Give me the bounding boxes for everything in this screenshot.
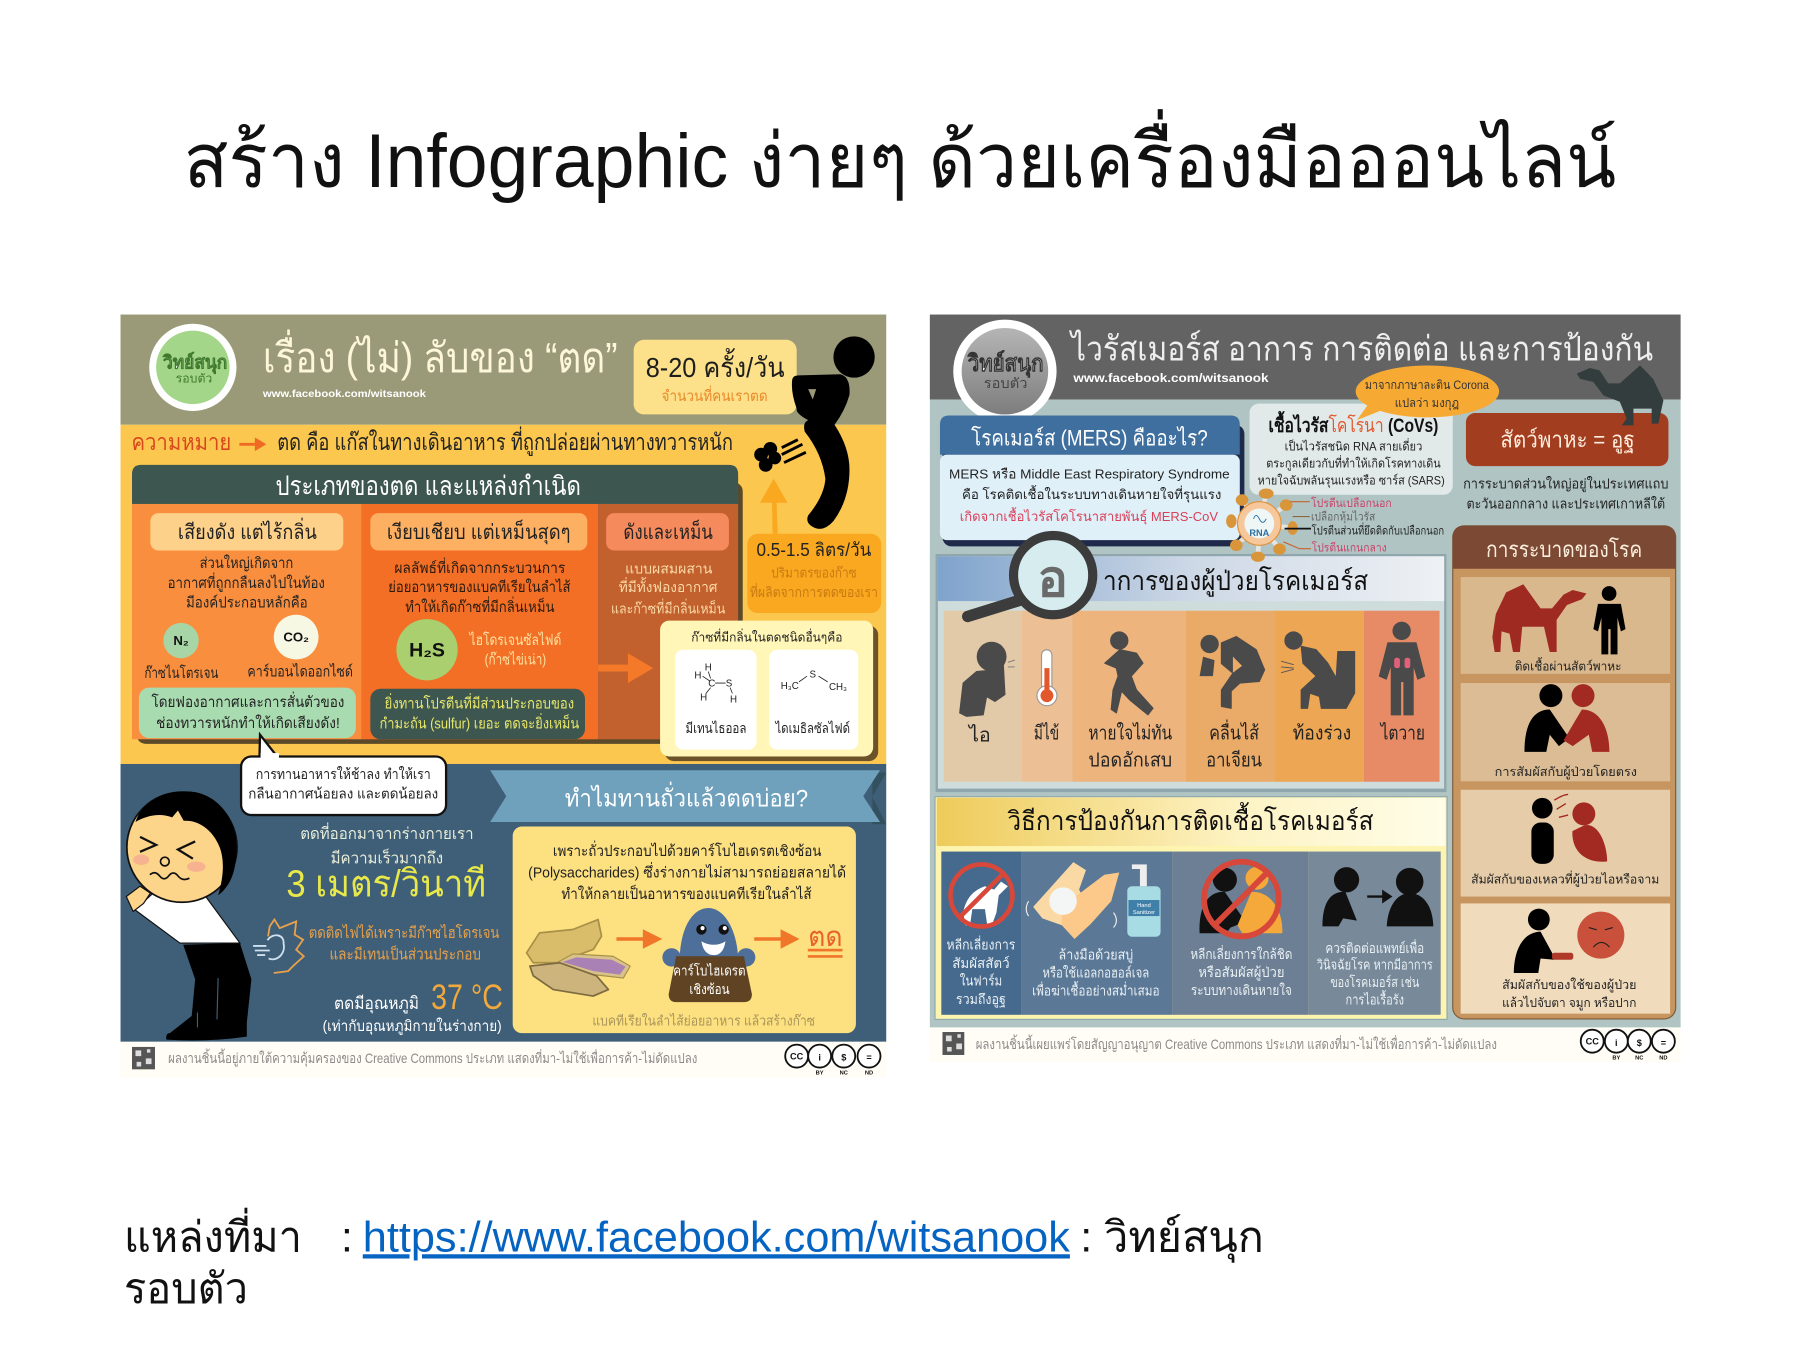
panel: beans explanation: เพราะถั่วประกอบไปด้วยคาร์โบไฮเดรตเชิงซ้อน: [553, 840, 821, 860]
panel: beans explanation: ทำให้กลายเป็นอาหารของแบคทีเรียในลำไส้: [561, 884, 812, 903]
icon: no contact: [1200, 862, 1282, 936]
panel: what is MERS: เกิดจากเชื้อไวรัสโคโรนาสายพันธุ์ MERS-CoV: [960, 507, 1218, 525]
virus labels: โปรตีนแกนกลาง: [1312, 540, 1387, 554]
text: outbreak regions: [1463, 476, 1669, 512]
icon: touching items: [1514, 909, 1624, 973]
icon: diarrhoea: [1281, 631, 1355, 708]
column: silent smelly: [370, 513, 587, 739]
heading: เรื่อง (ไม่) ลับของ “ตด”: [263, 329, 618, 381]
panel: disease transmission: สัมผัสกับของเหลวที่ผู้ป่วยไอหรือจาม: [1471, 870, 1659, 887]
footer: licence: CC: [1586, 1037, 1599, 1047]
prevention labels: หลีกเลี่ยงการ: [946, 936, 1015, 953]
panel: disease transmission: ติดเชื้อผ่านสัตว์พาหะ: [1515, 656, 1621, 673]
icon: flame burst: [253, 920, 304, 973]
temperature text: (เท่ากับอุณหภูมิกายในร่างกาย): [323, 1017, 502, 1035]
footer: licence: BY: [1612, 1056, 1620, 1062]
title: สร้าง Infographic ง่ายๆ ด้วยเครื่องมือออนไลน์: [184, 109, 1616, 204]
panel: left infographic about farts: [121, 315, 886, 1077]
callout: corona meaning: มาจากภาษาละติน Corona: [1365, 378, 1489, 392]
column: loud and smelly: และก๊าซที่มีกลิ่นเหม็น: [611, 599, 725, 618]
panel: symptoms: มีไข้: [1034, 722, 1059, 745]
molecule: methanethiol: [694, 662, 737, 706]
panel: what is MERS: โรคเมอร์ส (MERS) คืออะไร?: [971, 425, 1208, 450]
icon: washing hands: [1026, 862, 1161, 939]
result: fart: ตด: [808, 921, 843, 952]
footer: licence: CC: [790, 1052, 804, 1062]
flammable text: และมีเทนเป็นส่วนประกอบ: [329, 945, 481, 964]
footer: licence: i: [1615, 1038, 1618, 1048]
icon: camel and person: [1492, 584, 1626, 654]
speed text: 3 เมตร/วินาที: [286, 864, 486, 906]
icon: magnifying glass: อ: [1038, 550, 1068, 607]
panel: disease transmission: สัมผัสกับของใช้ของผู้ป่วย: [1502, 978, 1636, 993]
panel: other smelly gases: ไดเมธิลซัลไฟด์: [775, 720, 850, 736]
url: www.facebook.com/witsanook: [1072, 371, 1269, 385]
source line: รอบตัว: [124, 1265, 248, 1312]
virus labels: [1283, 496, 1444, 554]
stat: times per day: [634, 340, 797, 414]
footer: licence: BY: [816, 1070, 824, 1076]
icon: cough: [960, 642, 1015, 716]
stat: litres per day: ที่ผลิตจากการตดของเรา: [750, 583, 878, 600]
prevention labels: ของโรคเมอร์ส เช่น: [1330, 974, 1420, 990]
virus labels: โปรตีนเปลือกนอก: [1311, 496, 1392, 510]
icon: shortness of breath: [1105, 631, 1153, 715]
footer: licence: [132, 1045, 880, 1076]
icon: bacteria with carbohydrate box: [662, 908, 755, 1002]
callout: corona meaning: แปลว่า มงกุฎ: [1395, 396, 1459, 411]
text: outbreak regions: การระบาดส่วนใหญ่อยู่ในประเทศแถบ: [1463, 476, 1669, 493]
panel: prevention: วิธีการป้องกันการติดเชื้อโรคเมอร์ส: [1007, 802, 1374, 836]
panel: symptoms: ปอดอักเสบ: [1088, 749, 1172, 771]
column: silent smelly: กำมะถัน (sulfur) เยอะ ตดจะยิ่งเหม็น: [380, 712, 579, 732]
column: silent smelly: H₂S: [409, 640, 445, 662]
prevention labels: รวมถึงอูฐ: [956, 992, 1006, 1008]
stat: litres per day: [747, 534, 881, 613]
text: outbreak regions: ตะวันออกกลาง และประเทศเกาหลีใต้: [1467, 496, 1665, 512]
temperature text: [323, 977, 503, 1035]
logo: วิทย์สนุก: [162, 351, 227, 374]
panel: other smelly gases: [660, 621, 878, 761]
footer: licence: [942, 1030, 1675, 1062]
panel: symptoms: ไตวาย: [1379, 722, 1425, 745]
panel: disease transmission: การระบาดของโรค: [1486, 537, 1642, 562]
footer: licence: =: [866, 1053, 872, 1063]
speed text: มีความเร็วมากถึง: [331, 847, 443, 867]
panel: coronavirus: เชื้อไวรัสโคโรนา (CoVs): [1268, 410, 1438, 437]
panel: symptoms: ไอ: [967, 724, 991, 747]
icon: washing hands: Sanitizer: [1133, 910, 1155, 916]
panel: coronavirus: หายใจฉับพลันรุนแรงหรือ ซาร์ส (SARS): [1258, 473, 1445, 488]
molecule: methanethiol: S: [726, 678, 733, 689]
icon: droplets: [1531, 794, 1607, 864]
molecule: dimethyl sulfide: S: [809, 669, 816, 680]
prevention labels: ควรติดต่อแพทย์เพื่อ: [1325, 939, 1424, 956]
stat: litres per day: 0.5-1.5 ลิตร/วัน: [757, 539, 872, 560]
source line: :: [341, 1213, 353, 1260]
panel: coronavirus: เป็นไวรัสชนิด RNA สายเดี่ยว: [1285, 437, 1422, 453]
ribbon heading: why beans: [490, 770, 886, 824]
prevention labels: ในฟาร์ม: [960, 973, 1002, 989]
panel: carrier is camel: สัตว์พาหะ = อูฐ: [1500, 427, 1635, 454]
column: loud and smelly: แบบผสมผสาน: [625, 562, 713, 578]
logo: [953, 320, 1057, 423]
footer: licence: NC: [840, 1070, 848, 1076]
panel: symptoms: าการของผู้ป่วยโรคเมอร์ส: [1103, 566, 1368, 597]
panel: prevention: [935, 797, 1447, 1019]
prevention labels: หรือสัมผัสผู้ป่วย: [1198, 965, 1284, 981]
source line: แหล่งที่มา: [124, 1207, 302, 1260]
column: loud odourless: อากาศที่ถูกกลืนลงไปในท้อง: [168, 572, 325, 592]
panel: symptoms: [936, 554, 1446, 792]
column: silent smelly: ทำให้เกิดก๊าซที่มีกลิ่นเหม็น: [405, 596, 554, 616]
panel: disease transmission: [1453, 526, 1676, 1019]
temperature text: 37 °C: [431, 977, 503, 1017]
arrow: [616, 929, 662, 949]
arrow: [598, 653, 653, 683]
panel: other smelly gases: ก๊าซที่มีกลิ่นในตดชนิดอื่นๆคือ: [691, 629, 842, 645]
callout: corona meaning: [1356, 366, 1499, 420]
stat: times per day: 8-20 ครั้ง/วัน: [646, 348, 785, 383]
icon: magnifying glass: [968, 536, 1093, 616]
stat: litres per day: ปริมาตรของก๊าซ: [771, 565, 857, 580]
logo: รอบตัว: [984, 376, 1027, 391]
icon: washing hands: Hand: [1137, 903, 1151, 909]
footer: licence: ND: [865, 1070, 873, 1076]
panel: coronavirus: [1250, 404, 1453, 495]
column: silent smelly: เงียบเชียบ แต่เหม็นสุดๆ: [387, 518, 571, 545]
footer: licence: $: [841, 1053, 846, 1063]
panel: right infographic about MERS: [930, 315, 1681, 1062]
icon: farting figure: [792, 336, 875, 529]
virus labels: เปลือกหุ้มไวรัส: [1311, 510, 1375, 523]
column: silent smelly: ยิ่งทานโปรตีนที่มีส่วนประกอบของ: [384, 692, 574, 712]
panel: other smelly gases: มีเทนไธออล: [686, 721, 746, 736]
icon: camel silhouette: [1577, 365, 1663, 425]
panel: beans explanation: [513, 827, 856, 1033]
column: loud odourless: CO₂: [283, 630, 309, 645]
panel: disease transmission: การสัมผัสกับผู้ป่วยโดยตรง: [1495, 764, 1637, 780]
panel: what is MERS: MERS หรือ Middle East Respiratory Syndrome: [949, 466, 1230, 481]
molecule: dimethyl sulfide: CH₃: [829, 682, 847, 693]
icon: gas puff: [754, 440, 806, 472]
prevention labels: หรือใช้แอลกอฮอล์เจล: [1042, 964, 1149, 980]
arrow: [754, 929, 800, 949]
callout: eat slowly: [241, 735, 446, 815]
column: loud and smelly: ที่มีทั้งฟองอากาศ: [619, 577, 717, 596]
prevention labels: เพื่อฆ่าเชื้ออย่างสม่ำเสมอ: [1032, 981, 1160, 999]
column: loud and smelly: [606, 513, 729, 618]
icon: man in discomfort: [126, 791, 251, 1040]
molecule: methanethiol: C: [708, 678, 715, 689]
up arrow: [760, 479, 788, 534]
column: loud and smelly: ดังและเหม็น: [623, 518, 713, 544]
heading: ไวรัสเมอร์ส อาการ การติดต่อ และการป้องกัน: [1068, 329, 1653, 368]
icon: peanut: [527, 920, 630, 996]
icon: virus diagram: [1226, 488, 1298, 562]
column: silent smelly: ผลลัพธ์ที่เกิดจากกระบวนการ: [394, 557, 565, 577]
definition: ตด คือ แก๊สในทางเดินอาหาร ที่ถูกปล่อยผ่านทางทวารหนัก: [277, 426, 733, 456]
logo: วิทย์สนุก: [967, 350, 1043, 378]
icon: bacteria with carbohydrate box: เชิงซ้อน: [689, 982, 730, 997]
panel: symptoms: อาเจียน: [1206, 749, 1262, 771]
prevention labels: วินิจฉัยโรค หากมีอาการ: [1317, 957, 1433, 973]
virus labels: โปรตีนส่วนที่ยึดติดกับเปลือกนอก: [1312, 522, 1444, 537]
callout: eat slowly: การทานอาหารให้ช้าลง ทำให้เรา: [256, 766, 431, 783]
footer: licence: i: [818, 1053, 821, 1063]
icon: vomiting: [1200, 635, 1265, 708]
footer: licence: ผลงานชิ้นนี้อยู่ภายใต้ความคุ้มครองของ Creative Commons ประเภท แสดงที่มา-ไม่ใช้เพื่อการค้า-ไม่ดัดแปลง: [168, 1048, 697, 1067]
panel: types of farts: ประเภทของตด และแหล่งกำเนิด: [276, 471, 581, 501]
prevention labels: ล้างมือด้วยสบู่: [1059, 948, 1133, 964]
molecule: dimethyl sulfide: [781, 669, 847, 693]
panel: types of farts: [132, 465, 743, 744]
panel: beans explanation: แบคทีเรียในลำไส้ย่อยอาหาร แล้วสร้างก๊าซ: [592, 1013, 815, 1029]
molecule: methanethiol: H: [700, 692, 707, 703]
stat: times per day: จำนวนที่คนเราตด: [662, 385, 768, 405]
panel: beans explanation: (Polysaccharides) ซึ่งร่างกายไม่สามารถย่อยสลายได้: [528, 862, 846, 882]
footer: licence: ผลงานชิ้นนี้เผยแพร่โดยสัญญาอนุญาต Creative Commons ประเภท แสดงที่มา-ไม่ใช้เพื่อการค้า-ไม่ดัดแปลง: [976, 1034, 1497, 1053]
prevention labels: การไอเรื้อรัง: [1346, 989, 1404, 1007]
column: loud odourless: คาร์บอนไดออกไซด์: [247, 663, 353, 681]
source line: : วิทย์สนุก: [1080, 1213, 1264, 1263]
prevention labels: [946, 936, 1433, 1008]
definition: ความหมาย: [131, 429, 231, 455]
ribbon heading: why beans: ทำไมทานถั่วแล้วตดบ่อย?: [565, 782, 808, 813]
footer: licence: $: [1637, 1038, 1642, 1048]
icon: see doctor: [1322, 867, 1433, 926]
panel: symptoms: หายใจไม่ทัน: [1088, 722, 1172, 745]
logo: รอบตัว: [176, 371, 212, 385]
panel: symptoms: ท้องร่วง: [1293, 723, 1351, 745]
icon: kidney failure: [1379, 622, 1425, 715]
icon: direct contact: [1524, 684, 1609, 752]
flammable text: ตดติดไฟได้เพราะมีก๊าซไฮโดรเจน: [309, 924, 500, 942]
column: loud odourless: ช่องทวารหนักทำให้เกิดเสียงดัง!: [156, 714, 340, 732]
definition: [131, 426, 733, 456]
url: www.facebook.com/witsanook: [262, 389, 426, 400]
callout: eat slowly: กลืนอากาศน้อยลง และตดน้อยลง: [248, 785, 438, 802]
panel: symptoms: คลื่นไส้: [1209, 720, 1259, 745]
molecule: methanethiol: H: [730, 695, 737, 706]
panel: coronavirus: ตระกูลเดียวกับที่ทำให้เกิดโรคทางเดิน: [1266, 455, 1441, 472]
footer: licence: NC: [1635, 1056, 1643, 1062]
molecule: methanethiol: H: [694, 670, 701, 681]
source line: [124, 1207, 1264, 1312]
prevention labels: ระบบทางเดินหายใจ: [1191, 982, 1292, 998]
temperature text: ตดมีอุณหภูมิ: [334, 993, 419, 1014]
speed text: ตดที่ออกมาจากร่างกายเรา: [300, 822, 474, 843]
prevention labels: หลีกเลี่ยงการใกล้ชิด: [1190, 945, 1292, 962]
column: silent smelly: (ก๊าซไข่เน่า): [485, 651, 546, 669]
column: silent smelly: ไฮโดรเจนซัลไฟด์: [469, 631, 561, 649]
column: loud odourless: ส่วนใหญ่เกิดจาก: [200, 554, 293, 572]
panel: what is MERS: คือ โรคติดเชื้อในระบบทางเดินหายใจที่รุนแรง: [962, 485, 1221, 503]
icon: bacteria with carbohydrate box: คาร์โบไฮเดรต: [673, 962, 746, 978]
footer: licence: ND: [1659, 1056, 1668, 1062]
panel: disease transmission: แล้วไปจับตา จมูก หรือปาก: [1502, 996, 1636, 1011]
column: loud odourless: โดยฟองอากาศและการสั่นตัวของ: [152, 691, 344, 711]
column: silent smelly: ย่อยอาหารของแบคทีเรียในลำไส้: [388, 578, 570, 596]
panel: carrier is camel: [1466, 413, 1668, 466]
panel: what is MERS: [940, 416, 1244, 546]
icon: virus diagram: RNA: [1249, 528, 1270, 538]
molecule: methanethiol: H: [705, 662, 712, 673]
icon: thermometer: [1037, 650, 1057, 706]
footer: licence: =: [1661, 1038, 1666, 1048]
prevention labels: สัมผัสสัตว์: [952, 955, 1010, 971]
speed text: [286, 822, 486, 906]
flammable text: [309, 924, 500, 964]
source line: https://www.facebook.com/witsanook: [363, 1213, 1071, 1260]
molecule: dimethyl sulfide: H₃C: [781, 681, 799, 692]
column: loud odourless: [139, 513, 356, 738]
column: loud odourless: ก๊าซไนโตรเจน: [144, 664, 218, 682]
column: loud odourless: N₂: [173, 633, 189, 648]
column: loud odourless: เสียงดัง แต่ไร้กลิ่น: [178, 518, 317, 544]
column: loud odourless: มีองค์ประกอบหลักคือ: [186, 594, 308, 611]
logo: [149, 324, 236, 411]
icon: no camel: [951, 864, 1012, 926]
